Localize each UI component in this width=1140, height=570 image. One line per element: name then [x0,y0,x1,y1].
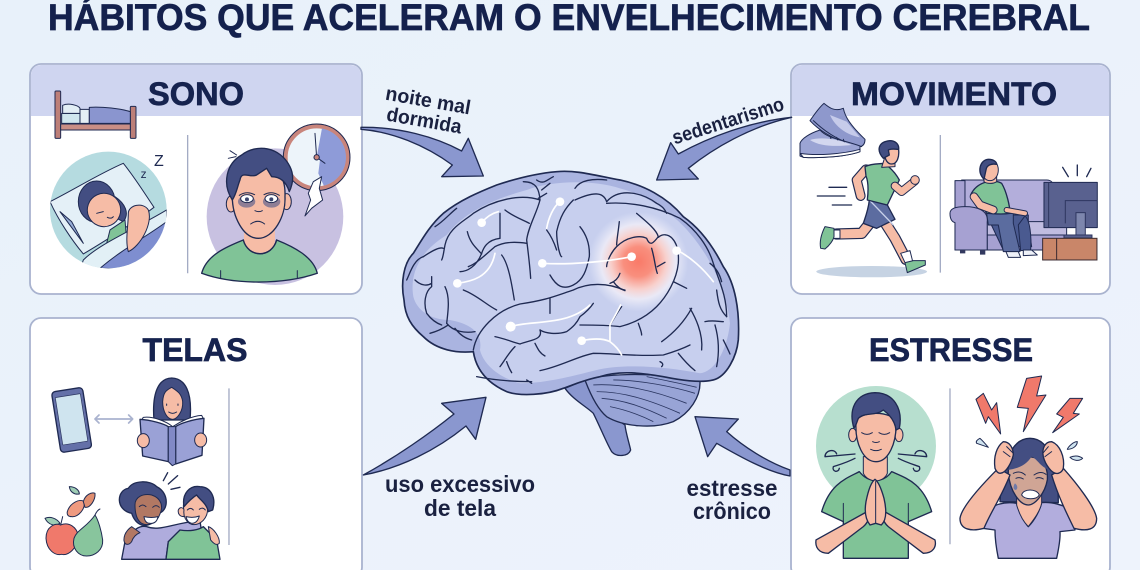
label: noite mal dormida: noite mal [384,83,472,119]
icon: bed [55,91,136,138]
label: estresse crônico [686,475,778,524]
label: noite mal dormida [384,83,472,139]
cerebellum [585,374,700,426]
label: noite mal dormida: dormida [385,104,464,139]
icon: fruit [45,487,103,556]
panel: estresse [791,318,1110,570]
arrow: sedentarismo [657,117,792,180]
connection lines [457,202,713,355]
text: zz: z [141,167,147,181]
illustration: two friends [119,473,220,559]
label: uso excessivo de tela: de tela [424,495,496,521]
heading: estresse: ESTRESSE [869,332,1033,368]
illustration: brain [403,171,739,455]
arrow: noite mal dormida [361,127,483,177]
panel: sono [30,64,362,294]
panel: movimento [791,64,1110,294]
nodes [453,197,681,345]
icon: phone [51,387,92,453]
arrow: phone to book [95,415,133,423]
label: sedentarismo: sedentarismo [670,93,787,149]
text: zz: Z [154,153,164,170]
sulci [407,177,730,383]
divider [186,135,190,273]
heading: movimento: MOVIMENTO [851,76,1057,112]
illustration: reader [137,378,207,466]
divider [938,135,942,273]
illustration: runner [816,141,927,277]
label: uso excessivo de tela [385,471,535,521]
divider [227,388,231,545]
label: uso excessivo de tela: uso excessivo [385,471,535,497]
illustration: stressed woman [960,376,1097,558]
illustration: calm breathing man [816,386,936,558]
text: zz [141,153,164,181]
cerebrum body [403,171,739,395]
panel: telas [30,318,362,570]
brain stem [565,380,631,455]
arrow: uso excessivo de tela [363,397,486,475]
illustration: man on couch with TV [950,159,1097,260]
label: estresse crônico: crônico [693,498,771,524]
divider [948,388,952,544]
icon: clock [283,124,350,216]
icon: sneakers [800,103,865,158]
arrow: estresse crônico [695,417,790,476]
illustration: restful sleep [50,152,167,270]
heading: telas: TELAS [142,332,248,368]
heading: sono: SONO [148,76,244,112]
gyri highlights [413,182,730,383]
label: estresse crônico: estresse [686,475,778,501]
illustration: tired man with clock [202,124,350,285]
icon: lightning bolts [976,376,1083,434]
